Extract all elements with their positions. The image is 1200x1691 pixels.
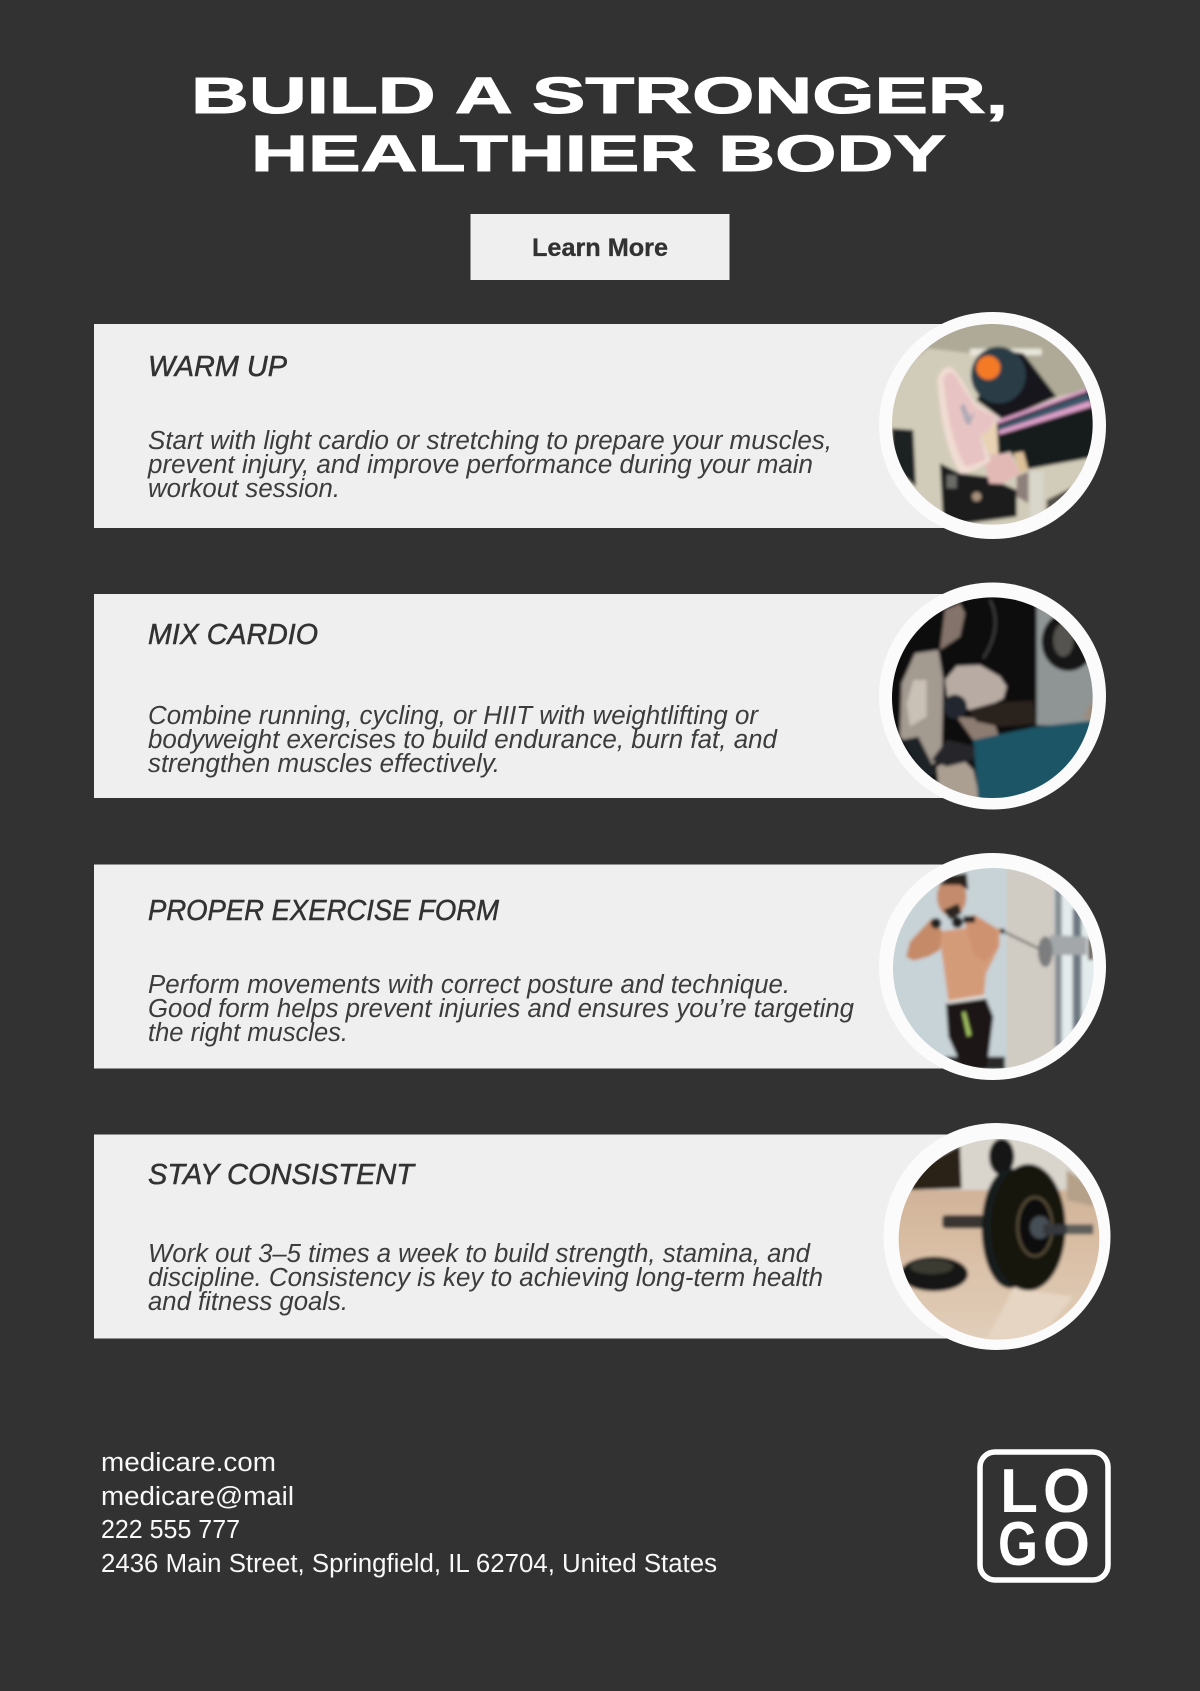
logo: O [1043, 1457, 1090, 1526]
contact details: 2436 Main Street, Springfield, IL 62704, United States [101, 1550, 717, 1578]
text: mix cardio description: bodyweight exercises to build endurance, burn fat, and [148, 726, 778, 754]
text: proper form description [148, 971, 854, 1047]
text: stay consistent description: and fitness goals. [148, 1288, 348, 1316]
text: stay consistent description: Work out 3–5 times a week to build strength, stamina, and [148, 1240, 811, 1268]
logo: G [998, 1510, 1038, 1579]
button: learn more [470, 214, 730, 280]
text: mix cardio description: strengthen muscles effectively. [148, 750, 500, 778]
text: proper form description: the right muscles. [148, 1019, 348, 1047]
contact details: medicare@mail [101, 1483, 294, 1511]
heading: proper exercise form: PROPER EXERCISE FORM [148, 895, 500, 927]
photo: man on bench press [879, 582, 1106, 810]
contact details: medicare.com [101, 1449, 276, 1477]
panel: warm up [94, 312, 1106, 539]
text: mix cardio description: Combine running, cycling, or HIIT with weightlifting or [148, 702, 760, 730]
panel: stay consistent [94, 1123, 1110, 1350]
text: warm up description: Start with light cardio or stretching to prepare your muscles, [148, 427, 832, 455]
photo: man at cable machine [879, 853, 1106, 1080]
text: proper form description: Good form helps prevent injuries and ensures you’re targeting [148, 995, 854, 1023]
contact details: 222 555 777 [101, 1516, 240, 1544]
title: HEALTHIER BODY [251, 125, 946, 182]
panel: proper exercise form [94, 853, 1106, 1080]
title: BUILD A STRONGER, [191, 67, 1008, 124]
text: warm up description [147, 427, 832, 503]
title [191, 67, 1008, 182]
heading: warm up: WARM UP [148, 351, 288, 383]
text: warm up description: prevent injury, and improve performance during your main [147, 451, 813, 479]
text: mix cardio description [148, 702, 778, 778]
contact details [101, 1449, 717, 1578]
text: stay consistent description: discipline. Consistency is key to achieving long-term health [148, 1264, 823, 1292]
heading: stay consistent: STAY CONSISTENT [148, 1159, 416, 1191]
text: warm up description: workout session. [148, 475, 340, 503]
logo: O [1043, 1510, 1090, 1579]
photo: sneakers on foam roller [879, 312, 1106, 539]
logo [980, 1452, 1108, 1580]
text: stay consistent description [148, 1240, 823, 1316]
photo: barbell on gym floor [884, 1123, 1110, 1350]
text: proper form description: Perform movements with correct posture and technique. [148, 971, 790, 999]
button: learn more: Learn More [532, 234, 668, 262]
logo: L [1000, 1457, 1038, 1526]
panel: mix cardio [94, 582, 1106, 810]
heading: mix cardio: MIX CARDIO [148, 619, 318, 651]
